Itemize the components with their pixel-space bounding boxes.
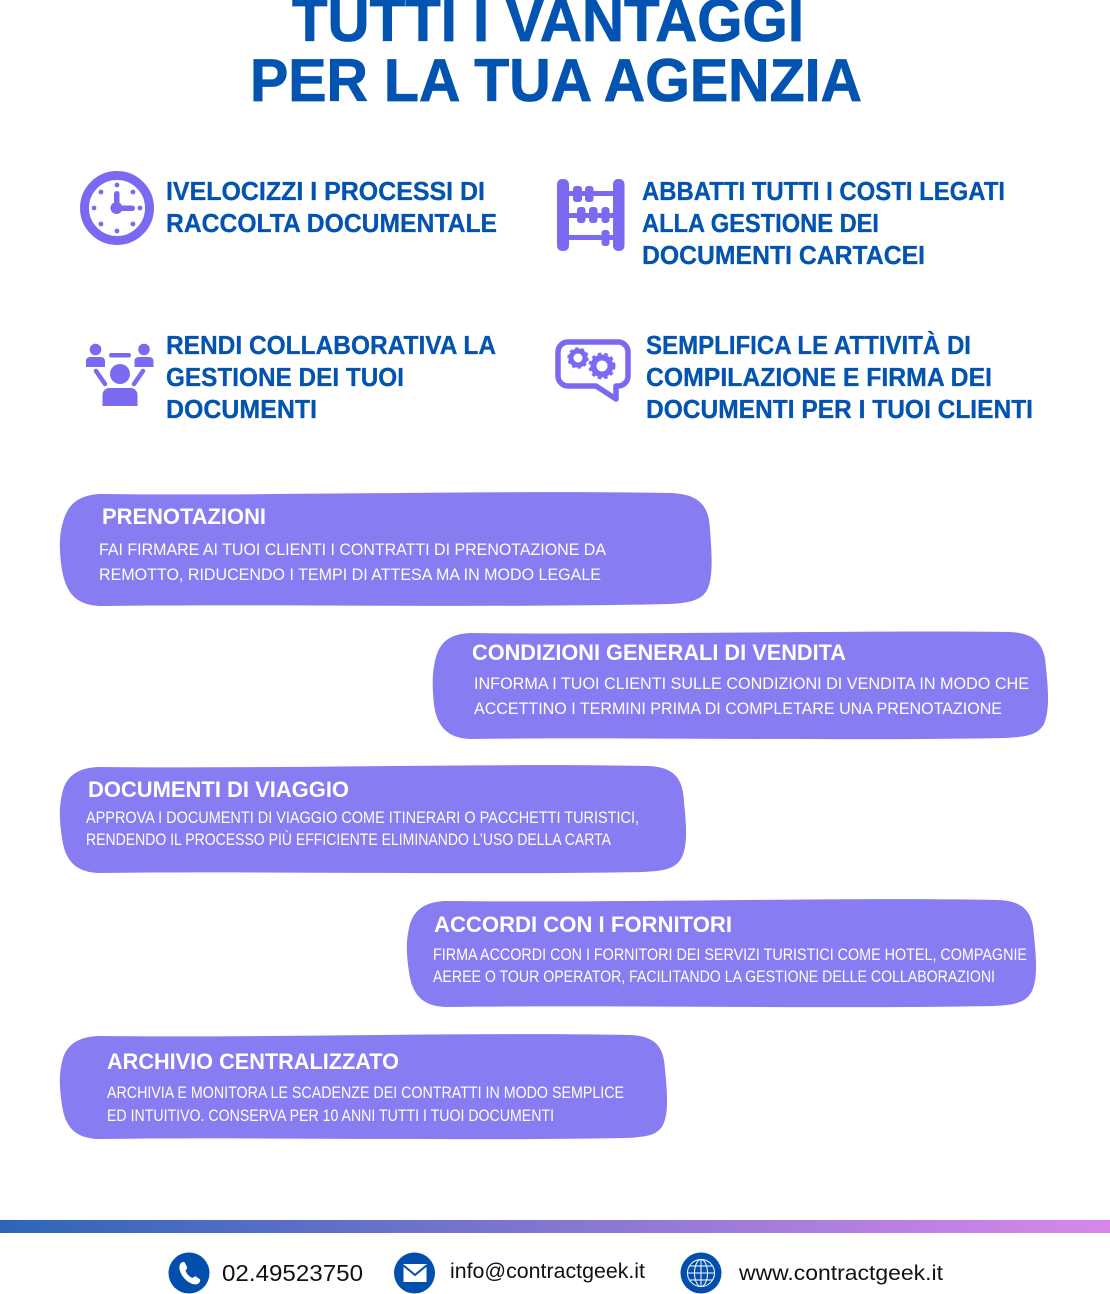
footer: phone: 02.49523750 (222, 1260, 363, 1286)
panel: archivio centralizzato (60, 1034, 667, 1139)
text block (646, 330, 1033, 424)
panel: documenti di viaggio: APPROVA I DOCUMENTI DI VIAGGIO COME ITINERARI O PACCHETTI TURISTICI, (86, 808, 639, 827)
text block: RENDI COLLABORATIVA LA (166, 330, 496, 360)
text block (642, 176, 1005, 270)
panel: prenotazioni (60, 492, 712, 606)
text block: RACCOLTA DOCUMENTALE (166, 208, 497, 238)
icon: globe (680, 1252, 722, 1294)
text block (166, 330, 496, 424)
panel: velocizza i processi (84, 176, 497, 240)
panel: abbatti i costi (557, 176, 1005, 270)
text block (166, 176, 497, 238)
panel: condizioni generali di vendita (433, 632, 1048, 739)
panel: prenotazioni: FAI FIRMARE AI TUOI CLIENTI I CONTRATTI DI PRENOTAZIONE DA (99, 540, 607, 559)
footer: email: info@contractgeek.it (450, 1259, 645, 1283)
panel: semplifica (558, 330, 1033, 424)
panel: documenti di viaggio: RENDENDO IL PROCESSO PIÙ EFFICIENTE ELIMINANDO L’USO DELLA CARTA (86, 830, 612, 849)
panel: prenotazioni: PRENOTAZIONI (102, 504, 266, 529)
footer: website: www.contractgeek.it (738, 1261, 943, 1285)
panel: archivio centralizzato: ARCHIVIO CENTRALIZZATO (107, 1049, 399, 1074)
text block: DOCUMENTI PER I TUOI CLIENTI (646, 394, 1033, 424)
icon: phone (168, 1252, 210, 1294)
icon: abacus (557, 179, 624, 251)
panel: accordi con i fornitori: AEREE O TOUR OPERATOR, FACILITANDO LA GESTIONE DELLE COLLABORAZIONI (433, 967, 995, 986)
panel: archivio centralizzato: ARCHIVIA E MONITORA LE SCADENZE DEI CONTRATTI IN MODO SEMPLICE (107, 1083, 624, 1102)
panel: condizioni generali di vendita: ACCETTINO I TERMINI PRIMA DI COMPLETARE UNA PRENOTAZIONE (474, 699, 1002, 718)
text block: IVELOCIZZI I PROCESSI DI (166, 176, 485, 206)
icon: speech bubble with gears (558, 342, 628, 399)
panel: condizioni generali di vendita: INFORMA I TUOI CLIENTI SULLE CONDIZIONI DI VENDITA IN MODO CHE (474, 674, 1029, 693)
panel: documenti di viaggio: DOCUMENTI DI VIAGGIO (88, 777, 349, 802)
text block: ABBATTI TUTTI I COSTI LEGATI (642, 176, 1005, 206)
panel: prenotazioni: REMOTTO, RIDUCENDO I TEMPI DI ATTESA MA IN MODO LEGALE (99, 565, 601, 584)
panel: accordi con i fornitori (407, 899, 1036, 1007)
panel: condizioni generali di vendita: CONDIZIONI GENERALI DI VENDITA (472, 640, 846, 665)
panel: archivio centralizzato: ED INTUITIVO. CONSERVA PER 10 ANNI TUTTI I TUOI DOCUMENTI (107, 1106, 554, 1125)
icon: team (86, 344, 154, 406)
footer: website (680, 1252, 943, 1294)
panel: documenti di viaggio (60, 765, 686, 873)
text block: SEMPLIFICA LE ATTIVITÀ DI (646, 330, 971, 360)
title: PER LA TUA AGENZIA (250, 47, 862, 114)
footer: phone (168, 1252, 363, 1294)
title (250, 0, 862, 114)
text block: GESTIONE DEI TUOI (166, 362, 404, 392)
text block: COMPILAZIONE E FIRMA DEI (646, 362, 992, 392)
text block: DOCUMENTI CARTACEI (642, 240, 925, 270)
icon: envelope (394, 1252, 435, 1294)
text block: DOCUMENTI (166, 394, 317, 424)
footer: email (394, 1252, 645, 1294)
panel: collaborativa (86, 330, 496, 424)
icon: clock (84, 176, 150, 240)
text block: ALLA GESTIONE DEI (642, 208, 879, 238)
panel: accordi con i fornitori: ACCORDI CON I FORNITORI (434, 912, 732, 937)
